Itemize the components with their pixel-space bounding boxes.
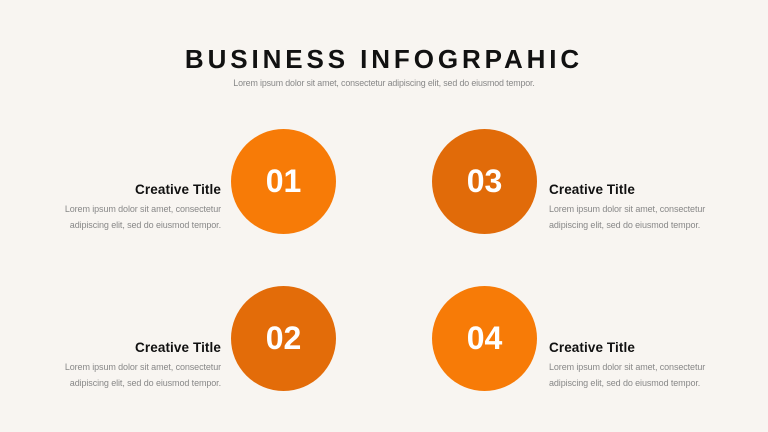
- item 04 text: [549, 340, 706, 388]
- title: BUSINESS INFOGRPAHIC: [185, 44, 583, 74]
- item 04 text: Creative Title: [549, 340, 635, 355]
- item 03 text: Lorem ipsum dolor sit amet, consectetur: [549, 204, 705, 214]
- item 03 text: adipiscing elit, sed do eiusmod tempor.: [549, 220, 700, 230]
- item 02 text: Lorem ipsum dolor sit amet, consectetur: [65, 362, 221, 372]
- circle 03: 03: [467, 163, 502, 199]
- circle 02: [231, 286, 336, 391]
- circle 02: 02: [266, 320, 301, 356]
- item 01 text: Creative Title: [135, 182, 221, 197]
- item 03 text: Creative Title: [549, 182, 635, 197]
- item 02 text: [65, 340, 221, 388]
- item 04 text: Lorem ipsum dolor sit amet, consectetur: [549, 362, 705, 372]
- item 03 text: [549, 182, 706, 230]
- item 02 text: Creative Title: [135, 340, 221, 355]
- item 01 text: Lorem ipsum dolor sit amet, consectetur: [65, 204, 221, 214]
- subtitle: Lorem ipsum dolor sit amet, consectetur adipiscing elit, sed do eiusmod tempor.: [233, 78, 535, 88]
- circle 04: 04: [467, 320, 502, 356]
- circle 04: [432, 286, 537, 391]
- circle 01: 01: [266, 163, 301, 199]
- item 04 text: adipiscing elit, sed do eiusmod tempor.: [549, 378, 700, 388]
- item 01 text: [65, 182, 221, 230]
- item 02 text: adipiscing elit, sed do eiusmod tempor.: [70, 378, 221, 388]
- item 01 text: adipiscing elit, sed do eiusmod tempor.: [70, 220, 221, 230]
- circle 03: [432, 129, 537, 234]
- circle 01: [231, 129, 336, 234]
